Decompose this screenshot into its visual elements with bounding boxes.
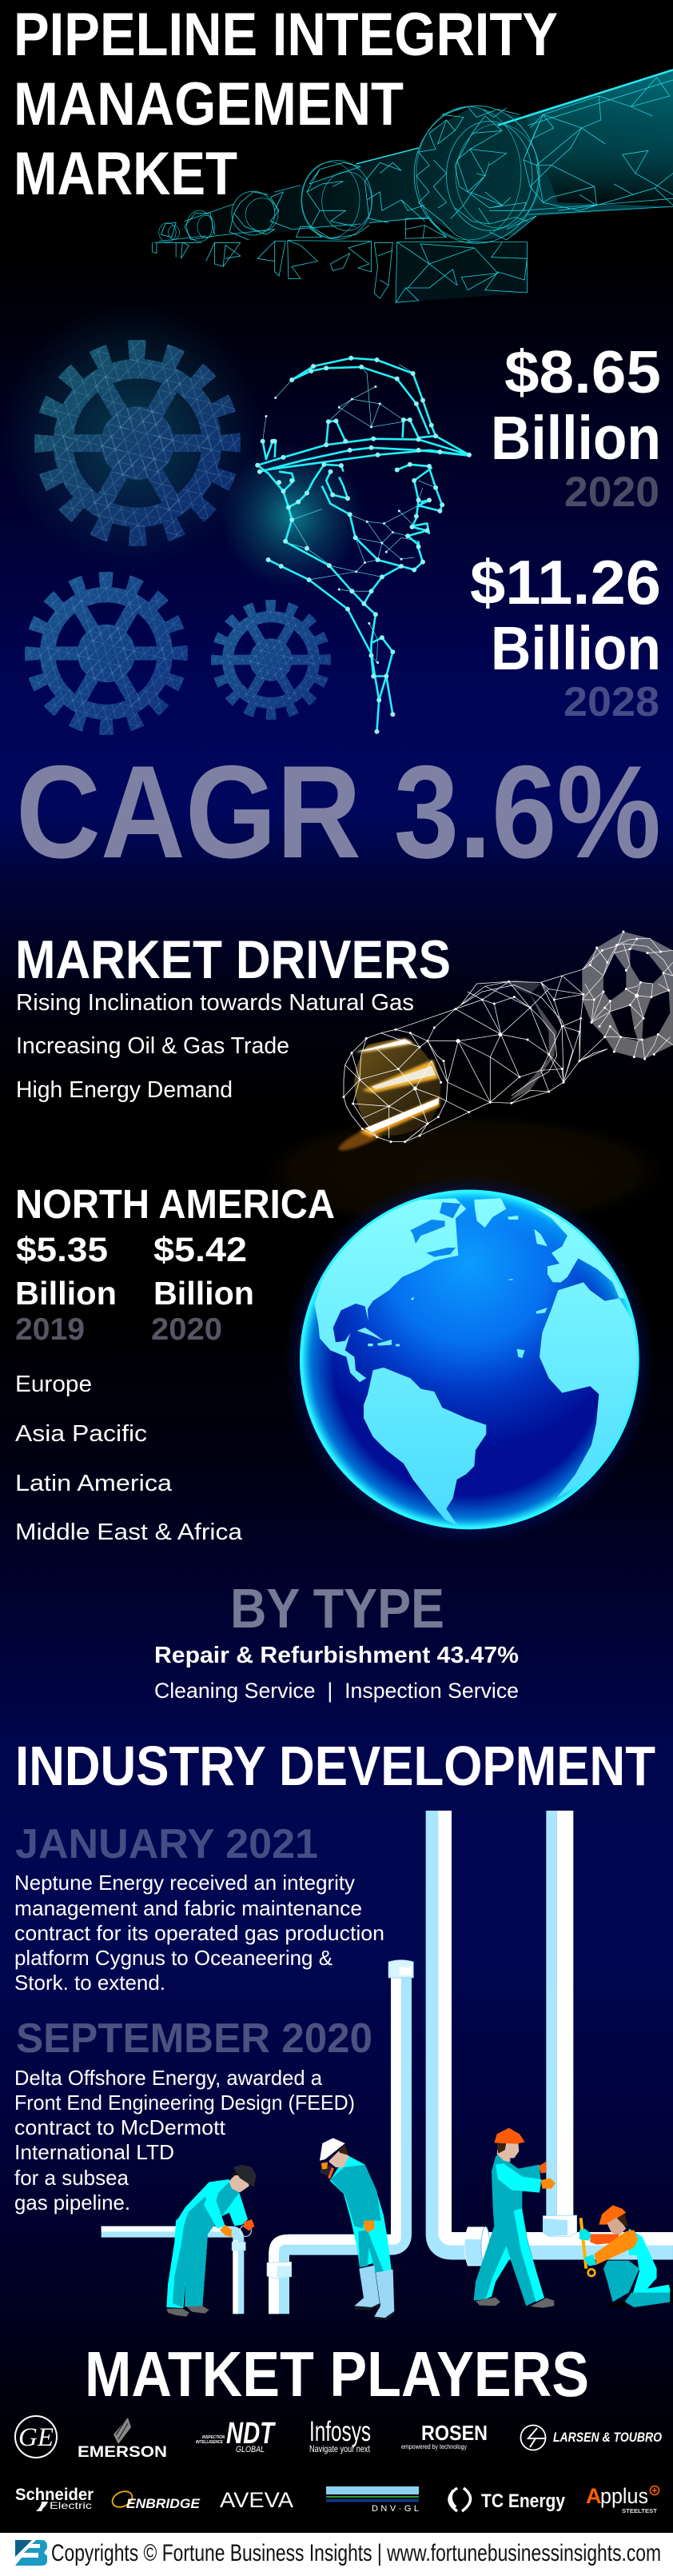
text: january 2021 development: contract for its operated gas production <box>14 1921 384 1945</box>
text: september 2020 development: contract to McDermott <box>14 2115 226 2139</box>
logo: GE <box>15 2416 57 2458</box>
icon: medium gear <box>33 580 180 727</box>
heading: by type: BY TYPE <box>230 1577 444 1639</box>
list: regions: Europe <box>15 1372 92 1397</box>
stat: 2028 market size: $11.26 <box>470 547 661 617</box>
title <box>14 1 558 208</box>
stat: north america 2020: $5.42 <box>153 1231 247 1269</box>
stat: north america 2020: Billion <box>153 1275 254 1312</box>
logo: Applus Steeltest: A <box>586 2484 601 2508</box>
text: january 2021 development <box>14 1871 384 1995</box>
illustration: wireframe worker head <box>220 358 469 732</box>
stat: 2028 market size <box>470 547 661 725</box>
logo: Rosen: ROSEN <box>421 2421 488 2445</box>
illustration: wireframe pipe and valve <box>336 932 673 1155</box>
illustration: globe <box>284 1174 655 1545</box>
illustration: right pipes <box>439 1811 673 2266</box>
logo: Schneider Electric: Electric <box>50 2500 92 2511</box>
heading: north america: NORTH AMERICA <box>15 1181 335 1227</box>
logo: DNV GL: DNV·GL <box>372 2504 419 2514</box>
text: january 2021 development: Stork. to extend. <box>14 1971 165 1995</box>
list: market drivers: High Energy Demand <box>16 1077 233 1103</box>
logo: Emerson <box>78 2418 167 2461</box>
stat: north america 2019: 2019 <box>15 1312 85 1347</box>
text: september 2020 development: for a subsea <box>14 2166 129 2190</box>
stat: 2020 market size <box>491 338 661 516</box>
logo: NDT Global: INTELLIGENCE <box>196 2440 224 2445</box>
logo: Fortune Business Insights <box>15 2540 47 2566</box>
illustration: wireframe pipeline <box>153 70 673 302</box>
logo: Schneider Electric: Schneider <box>15 2486 94 2504</box>
text: september 2020 development: Front End Engineering Design (FEED) <box>14 2091 355 2115</box>
logo: Enbridge: ENBRIDGE <box>126 2496 201 2511</box>
illustration: worker with cap at valve <box>166 2165 257 2317</box>
stat: 2020 market size: $8.65 <box>504 338 661 405</box>
logo: Aveva: AVEVA <box>220 2488 293 2512</box>
stat: north america 2019 <box>15 1231 117 1347</box>
footer bar <box>0 2533 673 2576</box>
stat: north america 2019: $5.35 <box>16 1231 108 1269</box>
list: regions <box>15 1372 243 1545</box>
logo: Enbridge <box>110 2488 201 2511</box>
logo: Applus Steeltest: pplus <box>600 2484 648 2508</box>
logo: Infosys: Navigate your next <box>309 2443 370 2454</box>
list: market drivers: Rising Inclination towards Natural Gas <box>16 990 414 1016</box>
logo: TC Energy <box>449 2488 566 2512</box>
heading: january 2021: JANUARY 2021 <box>15 1821 318 1867</box>
list: regions: Asia Pacific <box>15 1421 147 1447</box>
logo: DNV GL <box>326 2486 419 2514</box>
text: september 2020 development: International LTD <box>14 2140 174 2164</box>
text: september 2020 development: gas pipeline. <box>14 2191 130 2215</box>
decorative glow <box>261 1114 667 1229</box>
logo: NDT Global <box>196 2417 276 2454</box>
list: market drivers: Increasing Oil & Gas Trade <box>16 1033 289 1059</box>
text: other segments: Cleaning Service | Inspection Service <box>154 1679 519 1703</box>
illustration: left and centre pipes <box>102 1960 413 2314</box>
text: january 2021 development: Neptune Energy received an integrity <box>14 1871 355 1895</box>
illustration: kneeling worker with wrench <box>579 2205 673 2307</box>
logo: NDT Global: NDT <box>226 2417 276 2450</box>
stat: north america 2019: Billion <box>15 1275 117 1312</box>
heading: market players: MATKET PLAYERS <box>85 2338 589 2410</box>
logo: Infosys: Infosys <box>309 2416 371 2447</box>
list: market drivers <box>16 990 414 1103</box>
illustration: worker holding pipe <box>474 2128 556 2308</box>
logo: Rosen: empowered by technology <box>401 2442 468 2450</box>
list: regions: Middle East & Africa <box>15 1520 243 1545</box>
icon: large gear <box>0 304 264 568</box>
text: january 2021 development: platform Cygnus to Oceaneering & <box>14 1946 333 1970</box>
logo: Emerson: EMERSON <box>78 2444 167 2461</box>
logo: GE: GE <box>18 2423 54 2452</box>
text: leading segment: Repair & Refurbishment 43.47% <box>154 1643 519 1668</box>
illustration: worker with white helmet <box>320 2138 394 2320</box>
title: MANAGEMENT <box>14 70 404 138</box>
icon: small gear <box>217 606 325 713</box>
stat: north america 2020 <box>151 1231 254 1347</box>
logo: NDT Global: GLOBAL <box>236 2445 265 2454</box>
title: MARKET <box>14 140 237 208</box>
text: september 2020 development: Delta Offshore Energy, awarded a <box>14 2066 323 2090</box>
stat: north america 2020: 2020 <box>151 1312 222 1347</box>
stat: 2020 market size: 2020 <box>564 469 659 516</box>
logo: Infosys <box>309 2416 371 2454</box>
list: regions: Latin America <box>15 1471 173 1496</box>
logo: NDT Global: INSPECTION <box>202 2435 225 2440</box>
text: september 2020 development <box>14 2066 355 2215</box>
title: PIPELINE INTEGRITY <box>14 1 558 69</box>
stat: 2028 market size: 2028 <box>563 679 659 725</box>
text: january 2021 development: management and fabric maintenance <box>14 1896 362 1920</box>
logo: Larsen and Toubro <box>521 2425 662 2450</box>
heading: september 2020: SEPTEMBER 2020 <box>16 2015 372 2062</box>
logo: Applus Steeltest <box>586 2484 659 2514</box>
logo: TC Energy: TC Energy <box>481 2490 566 2512</box>
logo: Applus Steeltest: STEELTEST <box>622 2507 657 2514</box>
logo: Rosen <box>401 2421 488 2450</box>
heading: market drivers: MARKET DRIVERS <box>15 929 451 990</box>
